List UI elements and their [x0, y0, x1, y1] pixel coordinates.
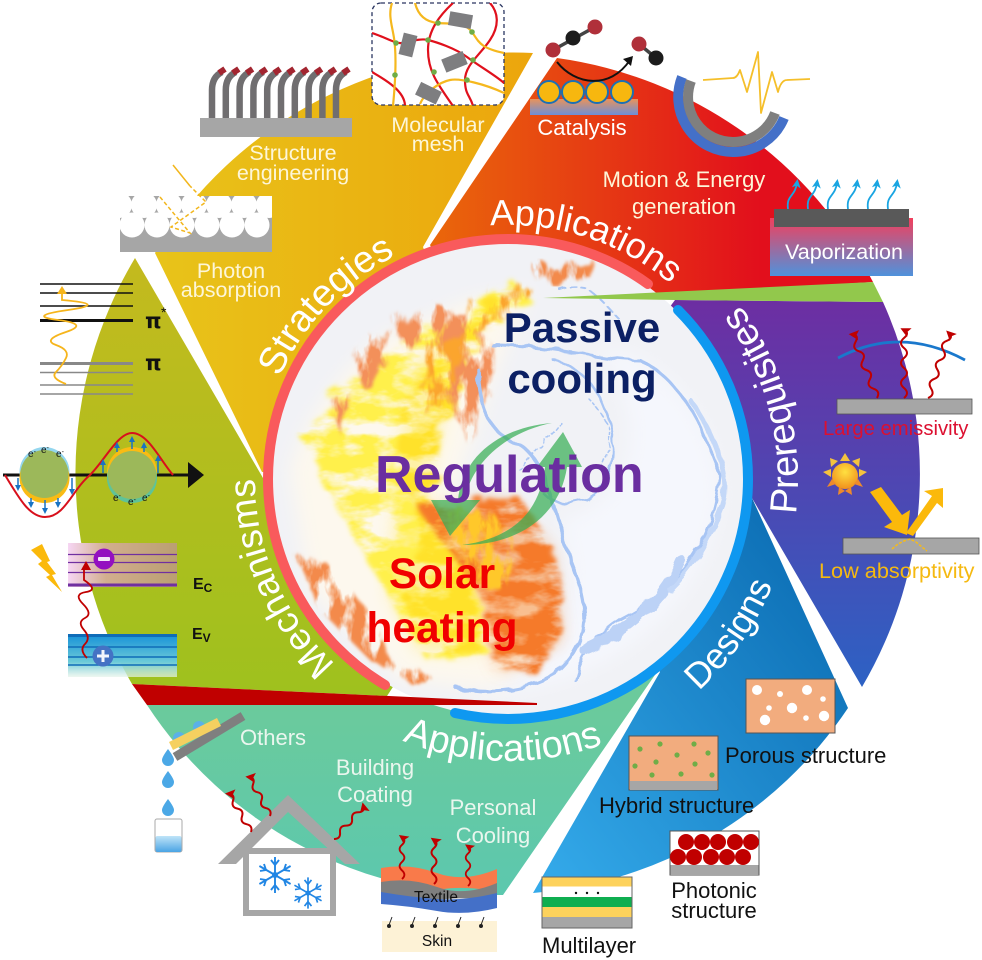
heading: applications solar: Applications — [490, 200, 680, 281]
icon: plasmonic oscillation: e — [142, 493, 148, 504]
icon: pi to pi-star energy levels: π — [145, 351, 162, 375]
icon: photonic structure — [670, 831, 759, 875]
panel: central disc — [132, 239, 883, 719]
icon: motion and energy bent film — [678, 52, 810, 152]
icon: plasmonic oscillation: - — [34, 449, 37, 456]
heading: applications cooling: Applications — [402, 720, 600, 764]
icon: porous structure — [746, 679, 835, 733]
label: building coating: Building — [336, 755, 414, 780]
panel: applications (cooling) — [147, 600, 657, 952]
label: hybrid structure: Hybrid structure — [599, 793, 754, 818]
icon: textile on skin — [381, 837, 497, 952]
label: low absorptivity: Low absorptivity — [819, 558, 975, 583]
icon: band gap excitation: V — [203, 631, 211, 645]
icon: plasmonic oscillation: - — [62, 449, 65, 456]
arrow: green downward — [431, 423, 552, 536]
panel: mechanisms — [3, 258, 450, 696]
label: personal cooling: Personal — [450, 795, 536, 820]
heading: designs: Designs — [684, 580, 770, 689]
icon: plasmonic oscillation: e — [113, 493, 119, 504]
label: structure engineering: engineering — [237, 161, 349, 185]
panel: prerequisites — [600, 300, 979, 687]
heading: strategies: Strategies — [260, 240, 392, 374]
label: molecular mesh: mesh — [412, 132, 464, 156]
label: structure engineering: Structure — [249, 141, 337, 165]
arrow: green upward — [462, 432, 582, 545]
icon: textile on skin: Textile — [414, 889, 458, 906]
icon: plasmonic oscillation — [3, 433, 204, 517]
icon: band gap excitation — [31, 543, 213, 677]
panel: strategies — [106, 3, 533, 479]
illustration: flame and water — [290, 262, 725, 691]
label: photonic structure: Photonic — [671, 878, 757, 903]
icon: multilayer — [542, 877, 632, 928]
label: catalysis: Catalysis — [537, 115, 627, 140]
label: multilayer: Multilayer — [542, 933, 636, 958]
label: photonic structure: structure — [671, 898, 757, 923]
ring: solar arc — [268, 239, 648, 685]
icon: plasmonic oscillation: e — [56, 449, 62, 460]
icon: plasmonic oscillation: e — [28, 449, 34, 460]
icon: plasmonic oscillation: e — [128, 497, 134, 508]
icon: sun with reflected light — [823, 453, 979, 554]
icon: vaporization: Vaporization — [785, 240, 903, 264]
wedge: dark red divider — [132, 684, 537, 705]
label: motion and energy generation: Motion & Energy — [603, 167, 765, 192]
icon: plasmonic oscillation: - — [119, 493, 122, 500]
icon: molecular mesh — [372, 3, 504, 106]
icon: photon absorption spheres — [120, 164, 272, 252]
label: molecular mesh: Molecular — [391, 113, 485, 137]
icon: pi to pi-star energy levels: * — [161, 304, 167, 320]
icon: band gap excitation: C — [204, 581, 213, 595]
title: passive cooling: cooling — [507, 355, 657, 402]
label: motion and energy generation: generation — [632, 194, 736, 219]
wedge: green divider — [543, 282, 883, 302]
heading: prerequisites: Prerequisites — [726, 308, 798, 512]
icon: plasmonic oscillation: - — [148, 493, 151, 500]
icon: catalysis — [530, 20, 664, 115]
title: regulation: Regulation — [375, 446, 644, 504]
ring: cooling arc — [455, 310, 748, 719]
icon: structure engineering pillars — [200, 69, 352, 137]
icon: band gap excitation: E — [192, 626, 203, 643]
panel: designs — [533, 498, 886, 958]
label: personal cooling: Cooling — [456, 823, 530, 848]
title: solar heating: Solar — [389, 551, 495, 598]
icon: band gap excitation: E — [193, 576, 204, 593]
label: photon absorption: Photon — [197, 259, 265, 283]
title: solar heating: heating — [366, 605, 518, 652]
label: others: Others — [240, 725, 306, 750]
icon: hybrid structure — [629, 736, 718, 790]
title: passive cooling: Passive — [504, 304, 660, 351]
icon: large emissivity — [837, 330, 972, 414]
icon: plasmonic oscillation: - — [47, 445, 50, 452]
label: porous structure: Porous structure — [725, 743, 886, 768]
icon: vaporization — [770, 183, 913, 276]
icon: pi to pi-star energy levels — [40, 284, 167, 394]
icon: cooled building — [218, 776, 365, 913]
panel: applications (solar) — [430, 20, 913, 400]
icon: plasmonic oscillation: e — [41, 445, 47, 456]
icon: plasmonic oscillation: - — [134, 497, 137, 504]
icon: water harvesting — [155, 716, 243, 852]
icon: textile on skin: Skin — [422, 933, 452, 950]
label: large emissivity: Large emissivity — [823, 418, 969, 440]
label: building coating: Coating — [337, 782, 413, 807]
label: photon absorption: absorption — [181, 278, 281, 302]
heading: mechanisms: Mechanisms — [235, 480, 334, 680]
icon: pi to pi-star energy levels: π — [145, 309, 162, 333]
